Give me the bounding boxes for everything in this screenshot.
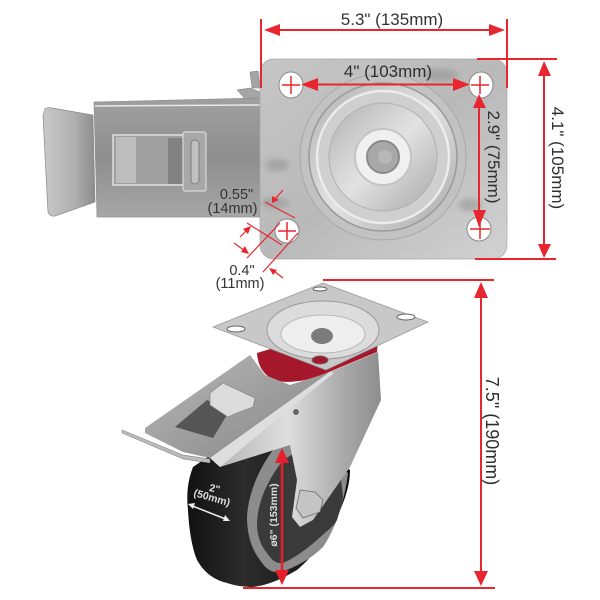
dimension: wheel width 2 in: 2" [208, 482, 221, 496]
top view: caster plate with brake [43, 59, 507, 259]
dimension: plate depth 4.1 in: 4.1" (105mm) [548, 107, 567, 209]
dimension: slot 0.55 in [208, 187, 295, 218]
dimension: wheel diameter 6 in: ø6" (153mm) [268, 483, 280, 547]
wheel tyre [187, 440, 350, 587]
dimension: hole spacing 4 in [301, 62, 470, 91]
brake window [113, 135, 183, 185]
plate raised disc [267, 301, 379, 359]
mounting plate [213, 283, 428, 370]
axle bolt [296, 490, 323, 518]
dimension: overall height 7.5 in: 7.5" (190mm) [482, 377, 502, 485]
red hub [257, 340, 378, 382]
wheel interior [257, 450, 343, 563]
side view: caster [122, 283, 428, 587]
mounting plate [260, 59, 507, 259]
plate shadows [261, 69, 482, 211]
brake tab [210, 383, 255, 417]
dimension: hole spacing 2.9 in [473, 94, 503, 227]
brake arm [145, 355, 330, 458]
brake lever pedal [43, 108, 95, 216]
brake window [175, 400, 230, 438]
fork lower edge [210, 372, 334, 467]
rivet [292, 408, 300, 416]
brake housing [94, 98, 261, 217]
dimension: slot 0.4 in: (11mm) [216, 276, 264, 292]
hole crosshairs [278, 76, 490, 240]
plate concentric rings [300, 74, 466, 240]
dimension: plate depth 4.1 in [475, 59, 567, 259]
plate holes [227, 287, 415, 364]
kingpin bolt [311, 328, 333, 344]
dimension: slot 0.4 in [216, 223, 298, 292]
dimension: plate width 5.3 in: 5.3" (135mm) [341, 10, 443, 29]
dimension: wheel width 2 in: (50mm) [192, 487, 231, 509]
hinge [237, 71, 260, 100]
dimension: slot 0.55 in: (14mm) [208, 201, 257, 217]
dimension: wheel diameter 6 in [268, 448, 289, 585]
brake tab [183, 132, 206, 191]
dimension: overall height 7.5 in [243, 280, 502, 588]
dimension: slot 0.55 in: 0.55" [220, 187, 253, 203]
dimension: slot 0.4 in: 0.4" [229, 263, 255, 279]
swivel fork [210, 352, 381, 527]
brake pedal edge [122, 430, 210, 463]
wheel rim [247, 440, 348, 572]
mounting holes [275, 72, 493, 243]
dimension: plate width 5.3 in [261, 10, 507, 88]
dimension: hole spacing 4 in: 4" (103mm) [344, 62, 432, 81]
dimension: hole spacing 2.9 in: 2.9" (75mm) [484, 111, 503, 203]
dimension: wheel width 2 in [188, 482, 231, 521]
